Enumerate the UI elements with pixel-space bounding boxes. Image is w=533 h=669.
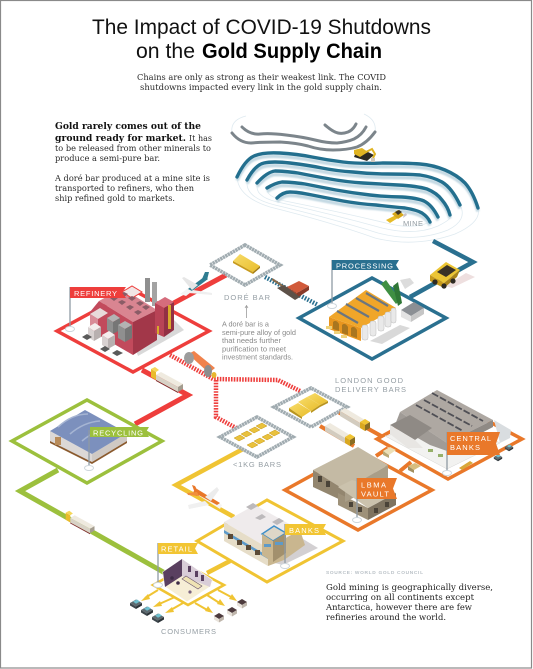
flag: banks [280, 524, 326, 568]
panel: banks [197, 500, 343, 582]
road: processing to doré bar [265, 277, 318, 305]
icon: plane at refinery [180, 272, 212, 296]
panel: london good delivery bars [274, 388, 347, 427]
intro text: A doré bar produced at a mine site is [54, 173, 210, 183]
label: doré bar: DORÉ BAR [224, 293, 271, 302]
flag: recycling: RECYCLING [93, 428, 143, 438]
building: central banks [385, 390, 513, 470]
panel: processing [299, 278, 446, 359]
subtitle [137, 72, 386, 92]
panel: central banks [377, 400, 522, 479]
flag: central banks: CENTRAL [450, 434, 491, 443]
text: doré bar note: A doré bar is a [222, 320, 270, 328]
road: refinery to bars [170, 355, 300, 428]
flag: refinery: REFINERY [74, 289, 117, 298]
building: banks [224, 503, 318, 566]
flag: banks: BANKS [289, 526, 319, 535]
icon: excavator [354, 148, 375, 162]
label: london good delivery bars: DELIVERY BARS [335, 385, 406, 394]
title: on the [136, 40, 195, 63]
flag: processing: PROCESSING [336, 262, 393, 270]
text: doré bar note: investment standards. [222, 352, 293, 362]
building: processing [326, 278, 424, 344]
label: mine: MINE [403, 219, 423, 228]
text: doré bar note: that needs further [222, 336, 282, 345]
panel: recycling [12, 400, 162, 483]
arrows: retail to consumers [141, 590, 237, 613]
panel: retail [153, 566, 224, 605]
flag: lbma vault: VAULT [361, 490, 389, 498]
closing text: Gold mining is geographically diverse, [326, 583, 493, 593]
road: banks to retail [207, 561, 230, 573]
mine [232, 114, 479, 242]
intro text [54, 121, 212, 203]
text: doré bar note: semi-pure alloy of gold [222, 328, 296, 337]
intro text: to be released from other minerals to [55, 143, 211, 153]
arrow: doré bar note [245, 306, 248, 318]
flag: retail [154, 543, 198, 588]
icon: truck on green road [66, 511, 94, 534]
flag: processing [328, 260, 399, 308]
label: london good delivery bars [335, 376, 406, 394]
icon: bulldozer [386, 210, 407, 223]
subtitle: shutdowns impacted every link in the gold supply chain. [140, 82, 382, 92]
road: mine to processing [410, 241, 473, 297]
intro text: Gold rarely comes out of the [55, 121, 201, 132]
closing text: refineries around the world. [326, 613, 446, 623]
panel: doré bar [210, 245, 280, 285]
closing text [325, 583, 493, 623]
flag: recycling [84, 427, 149, 470]
icon: second truck on delivery road [325, 423, 355, 446]
icon: truck on red road [151, 367, 183, 393]
intro text: ground ready for market. [55, 133, 186, 144]
panel: less than 1kg bars [220, 417, 293, 457]
title: Gold Supply Chain [202, 40, 382, 63]
text: doré bar note [222, 320, 296, 362]
flag: refinery [66, 287, 126, 332]
intro text: ship refined gold to markets. [55, 193, 175, 203]
road: refinery to recycling [135, 370, 188, 424]
closing text: occurring on all continents except [326, 593, 475, 603]
icon: vans between vaults [383, 447, 421, 473]
road: recycling to retail [20, 470, 165, 573]
intro text: transported to refiners, who then [55, 183, 195, 193]
panel: refinery [57, 290, 209, 372]
label: under 1kg bars: <1KG BARS [233, 460, 281, 469]
intro text: It has [189, 133, 212, 143]
building: lbma vault [313, 447, 396, 520]
road: doré bar to refinery [172, 275, 226, 304]
label: london good delivery bars: LONDON GOOD [335, 376, 404, 385]
icon: rotary kiln [184, 351, 216, 378]
text: doré bar note: purification to meet [222, 344, 286, 354]
intro text: produce a semi-pure bar. [55, 153, 160, 163]
flag: retail: RETAIL [161, 544, 192, 554]
flag: central banks [442, 432, 500, 476]
icons: consumer houses [214, 599, 247, 622]
building: recycling [50, 410, 127, 464]
source: SOURCE: WORLD GOLD COUNCIL [326, 570, 423, 576]
roads: delivery bars to vaults [320, 412, 411, 471]
title [92, 16, 431, 63]
panel: lbma vault [285, 450, 432, 530]
flag: lbma vault: LBMA [361, 480, 386, 490]
icons: consumer cars [130, 600, 164, 623]
label: consumers: CONSUMERS [161, 627, 216, 636]
closing text: Antarctica, however there are few [325, 603, 473, 613]
icon: truck on delivery road [340, 408, 370, 431]
road: small bars to banks [176, 449, 243, 517]
building: retail store [163, 559, 212, 602]
flag: central banks: BANKS [450, 443, 480, 452]
building: refinery [82, 278, 184, 356]
flag: lbma vault [352, 478, 397, 522]
subtitle: Chains are only as strong as their weakest link. The COVID [137, 72, 386, 82]
icon: plane near banks [187, 485, 222, 509]
title: The Impact of COVID-19 Shutdowns [92, 16, 431, 39]
icon: crusher machine [272, 279, 309, 300]
icon: mine truck [430, 262, 475, 289]
